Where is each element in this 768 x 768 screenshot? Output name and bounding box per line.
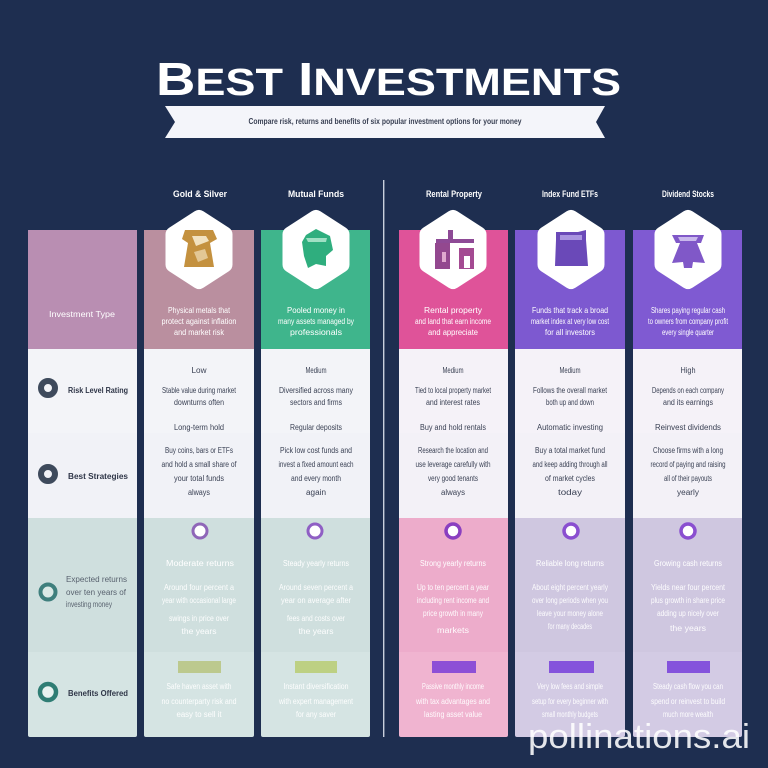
header description: many assets managed by — [278, 317, 354, 326]
risk cell — [162, 366, 237, 432]
risk cell: Low — [192, 366, 207, 375]
row label: expected returns — [40, 575, 127, 609]
benefits cell: Passive monthly income — [422, 682, 484, 691]
strategy cell: record of paying and raising — [650, 460, 726, 469]
column divider — [383, 180, 384, 737]
icon: gold bag — [174, 218, 224, 281]
header description: Funds that track a broad — [532, 306, 608, 315]
risk cell: Long-term hold — [174, 423, 224, 432]
benefits cell: much more wealth — [663, 710, 713, 719]
watermark: pollinations.ai — [528, 718, 750, 756]
header description: protect against inflation — [162, 317, 236, 326]
benefits cell: Steady cash flow you can — [653, 682, 723, 691]
title: BEST INVESTMENTS — [156, 53, 621, 105]
header description: Shares paying regular cash — [651, 306, 725, 315]
benefits cell: setup for every beginner with — [532, 697, 608, 706]
risk cell — [279, 366, 353, 432]
strategy cell: always — [188, 488, 210, 497]
header description: Physical metals that — [168, 306, 231, 315]
header description — [278, 306, 354, 337]
returns cell: plus growth in share price — [651, 596, 725, 605]
returns cell: markets — [437, 626, 469, 635]
strategy cell: and every month — [291, 474, 341, 483]
returns cell — [651, 524, 726, 633]
benefits cell: Instant diversification — [284, 682, 348, 691]
benefits cell: small monthly budgets — [542, 710, 598, 719]
strategy cell — [416, 446, 490, 497]
panel: gold column: Gold & Silver — [173, 189, 227, 199]
subtitle ribbon — [165, 106, 605, 138]
risk cell: Buy and hold rentals — [420, 423, 486, 432]
strategy cell: always — [441, 488, 465, 497]
returns cell: adding up nicely over — [657, 609, 719, 618]
row label: expected returns: Expected returns — [66, 575, 127, 584]
strategy cell: today — [558, 488, 582, 497]
risk cell: Medium — [306, 366, 327, 375]
risk cell: Reinvest dividends — [655, 423, 721, 432]
panel: mutual funds column — [261, 189, 370, 737]
risk cell — [415, 366, 492, 432]
row label: expected returns: over ten years of — [66, 588, 127, 597]
risk cell: and its earnings — [663, 398, 713, 407]
panel: dividend stocks column — [633, 189, 742, 737]
strategy cell: your total funds — [174, 474, 224, 483]
header description: for all investors — [545, 328, 595, 337]
row label: benefits — [40, 684, 128, 700]
risk cell — [652, 366, 724, 432]
returns cell: Up to ten percent a year — [417, 583, 489, 592]
panel: dividend stocks column: Dividend Stocks — [662, 189, 714, 199]
icon: purple stand — [662, 218, 714, 281]
panel: real estate column: Rental Property — [426, 189, 482, 199]
strategy cell: Choose firms with a long — [653, 446, 723, 455]
header description — [648, 306, 729, 337]
strategy cell — [532, 446, 608, 497]
header description — [162, 306, 236, 337]
risk cell: Medium — [442, 366, 464, 375]
returns cell: swings in price over — [169, 614, 229, 623]
returns cell: the years — [298, 627, 334, 636]
risk cell: Regular deposits — [290, 423, 342, 432]
benefits cell: with expert management — [278, 697, 354, 706]
benefits cell: Very low fees and simple — [537, 682, 603, 691]
strategy cell — [278, 446, 354, 497]
benefits cell: spend or reinvest to build — [651, 697, 725, 706]
header description: professionals — [290, 328, 342, 337]
returns cell: Moderate returns — [166, 559, 234, 568]
risk cell: Automatic investing — [537, 423, 603, 432]
returns cell: About eight percent yearly — [532, 583, 608, 592]
returns cell: the years — [670, 624, 706, 633]
strategy cell: Buy a total market fund — [535, 446, 605, 455]
header description: and market risk — [174, 328, 225, 337]
returns cell: leave your money alone — [537, 609, 603, 618]
risk cell: Medium — [560, 366, 581, 375]
risk cell: High — [680, 366, 696, 375]
risk cell: and interest rates — [426, 398, 480, 407]
risk cell: Diversified across many — [279, 386, 353, 395]
risk cell: Depends on each company — [652, 386, 724, 395]
returns cell: Around four percent a — [164, 583, 234, 592]
strategy cell: very good tenants — [428, 474, 478, 483]
strategy cell: Pick low cost funds and — [280, 446, 352, 455]
benefits cell: Safe haven asset with — [166, 682, 232, 691]
risk cell: both up and down — [546, 398, 594, 407]
row label: benefits: Benefits Offered — [68, 689, 128, 698]
subtitle ribbon: Compare risk, returns and benefits of six popular investment options for your money — [248, 117, 522, 126]
panel: mutual funds column: Mutual Funds — [288, 189, 344, 199]
returns cell — [162, 524, 236, 636]
returns cell: Reliable long returns — [536, 559, 604, 568]
benefits cell: for any saver — [296, 710, 336, 719]
returns cell: Strong yearly returns — [420, 559, 486, 568]
risk cell: Follows the overall market — [533, 386, 608, 395]
strategy cell: use leverage carefully with — [416, 460, 490, 469]
panel: index funds column: Index Fund ETFs — [542, 189, 598, 199]
returns cell: Yields near four percent — [651, 583, 726, 592]
returns cell: Steady yearly returns — [283, 559, 349, 568]
strategy cell: Buy coins, bars or ETFs — [165, 446, 233, 455]
returns cell: year on average after — [281, 596, 351, 605]
row label: risk level: Risk Level Rating — [68, 386, 128, 395]
strategy cell: all of their payouts — [664, 474, 712, 483]
row label: expected returns: investing money — [66, 600, 112, 609]
returns cell: fees and costs over — [287, 614, 345, 623]
strategy cell — [162, 446, 237, 497]
panel: real estate column — [399, 189, 508, 737]
returns cell: including rent income and — [417, 596, 489, 605]
benefits cell — [162, 661, 236, 719]
panel: row labels column — [28, 230, 137, 737]
risk cell: downturns often — [174, 398, 224, 407]
icon: buildings — [428, 218, 478, 281]
risk cell — [533, 366, 608, 432]
benefits cell — [415, 661, 490, 719]
returns cell: Around seven percent a — [279, 583, 353, 592]
benefits cell — [651, 661, 725, 719]
strategy cell: and hold a small share of — [162, 460, 237, 469]
row label: strategy: Best Strategies — [68, 472, 129, 481]
strategy cell: invest a fixed amount each — [278, 460, 354, 469]
header description: and appreciate — [428, 328, 479, 337]
benefits cell — [278, 661, 354, 719]
row label: risk level — [41, 381, 128, 395]
benefits cell: no counterparty risk and — [162, 697, 236, 706]
icon: purple jar — [546, 218, 596, 281]
benefits cell: with tax advantages and — [415, 697, 490, 706]
returns cell: for many decades — [548, 622, 592, 631]
strategy cell: of market cycles — [545, 474, 595, 483]
risk cell: sectors and firms — [290, 398, 342, 407]
header description: to owners from company profit — [648, 317, 729, 326]
header description: and land that earn income — [415, 317, 491, 326]
returns cell: the years — [182, 627, 216, 636]
header description — [415, 306, 491, 337]
strategy cell: Research the location and — [418, 446, 488, 455]
returns cell: price growth in many — [423, 609, 483, 618]
benefits cell: lasting asset value — [424, 710, 482, 719]
row label: strategy — [41, 467, 129, 481]
strategy cell: again — [306, 488, 326, 497]
header description: market index at very low cost — [531, 317, 610, 326]
header description — [531, 306, 610, 337]
strategy cell: and keep adding through all — [532, 460, 608, 469]
returns cell: year with occasional large — [162, 596, 236, 605]
panel: gold column — [144, 189, 254, 737]
strategy cell — [650, 446, 726, 497]
label: investment type: Investment Type — [49, 310, 116, 319]
returns cell — [417, 524, 489, 635]
risk cell: Tied to local property market — [415, 386, 492, 395]
benefits cell: easy to sell it — [176, 710, 222, 719]
strategy cell: yearly — [677, 488, 699, 497]
panel: index funds column — [515, 189, 625, 737]
risk cell: Stable value during market — [162, 386, 237, 395]
returns cell: Growing cash returns — [654, 559, 722, 568]
returns cell — [532, 524, 608, 631]
returns cell: over long periods when you — [532, 596, 608, 605]
icon: green bag — [290, 218, 342, 281]
returns cell — [279, 524, 353, 636]
benefits cell — [532, 661, 608, 719]
header description: every single quarter — [662, 328, 714, 337]
header description: Rental property — [424, 306, 482, 315]
header description: Pooled money in — [287, 306, 345, 315]
